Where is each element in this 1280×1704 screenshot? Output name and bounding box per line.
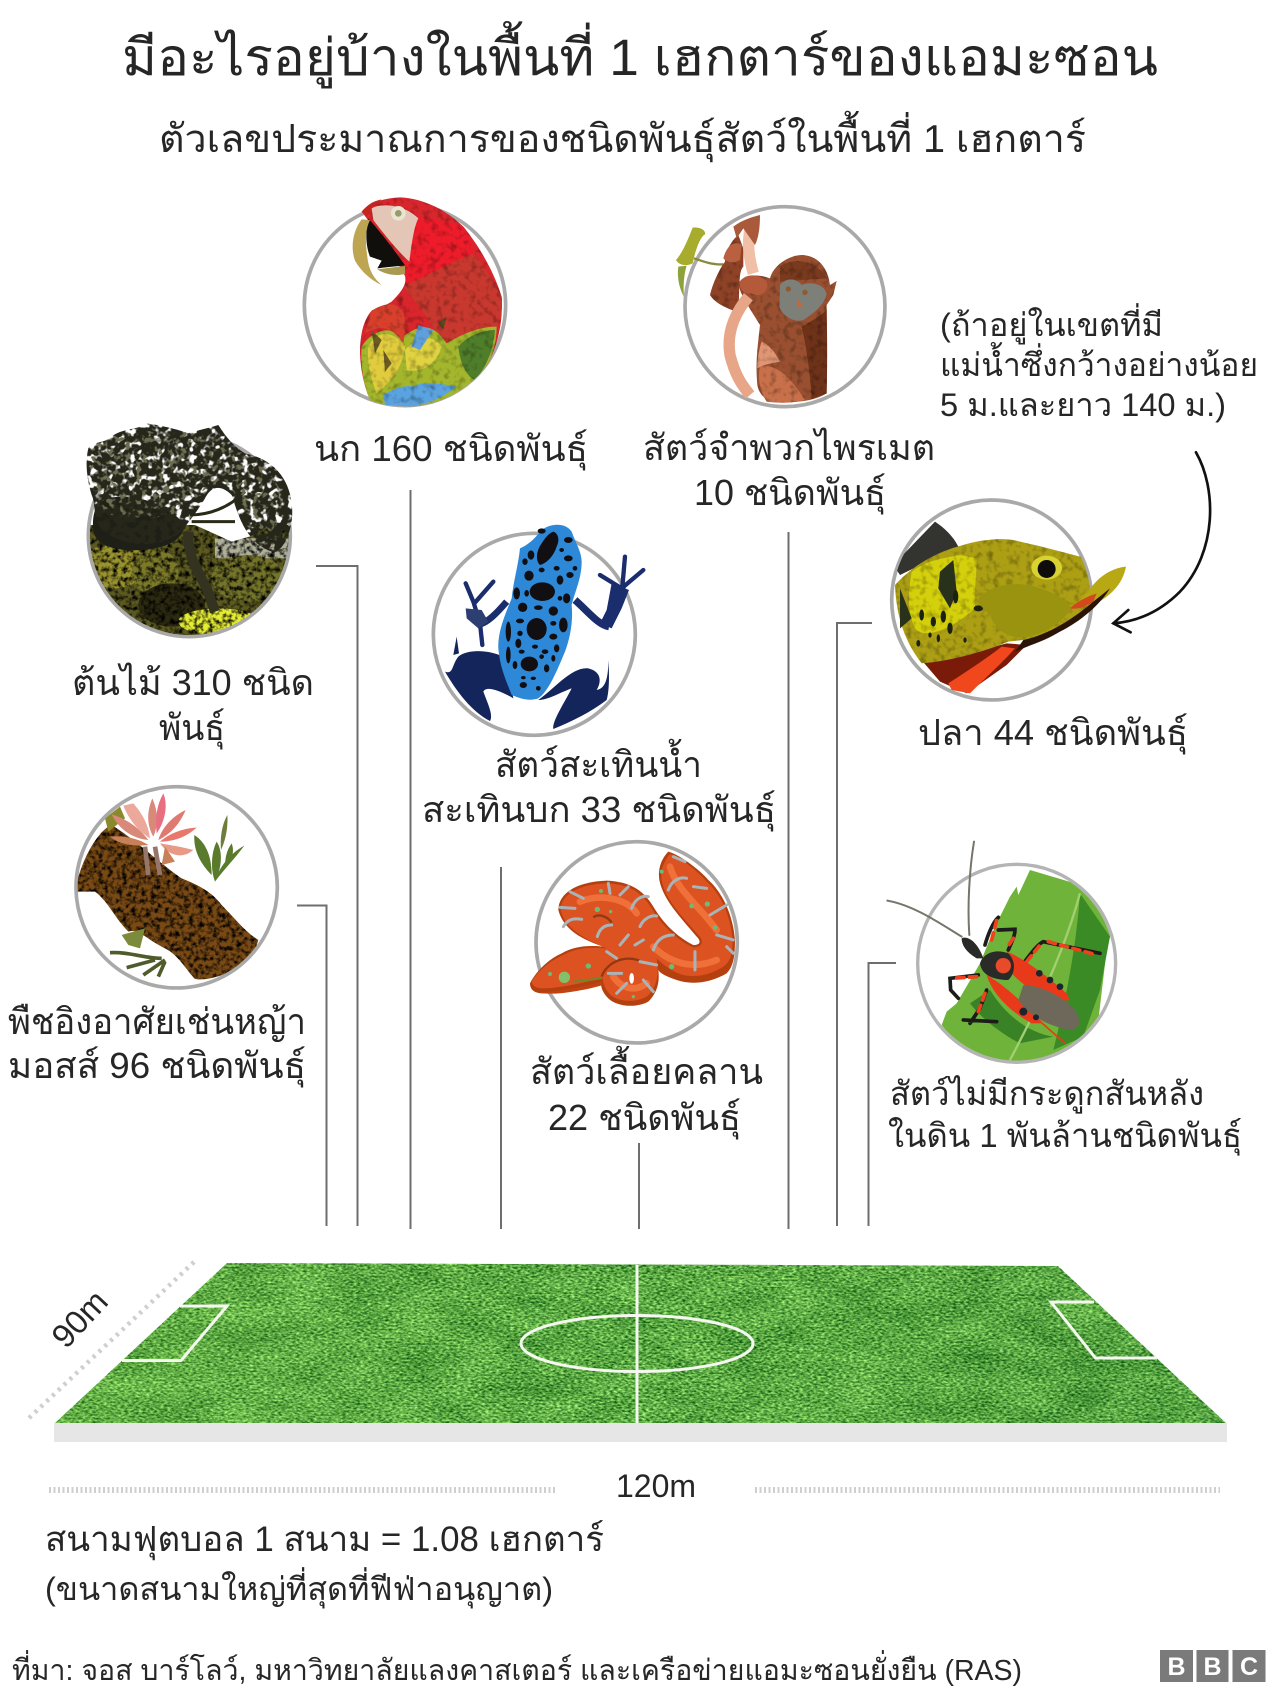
label: นก 160 ชนิดพันธุ์ <box>314 428 588 471</box>
text: pitch size note <box>45 1520 604 1609</box>
subtitle: ตัวเลขประมาณการของชนิดพันธุ์สัตว์ในพื้นที่ 1 เฮกตาร์ <box>159 110 1086 163</box>
source: ที่มา: จอส บาร์โลว์, มหาวิทยาลัยแลงคาสเตอร์ และเครือข่ายแอมะซอนยั่งยืน (RAS) <box>12 1650 1022 1687</box>
arrow: note to fish <box>1113 452 1210 632</box>
icon: rainforest tree in circle <box>85 423 292 638</box>
label: พืชอิงอาศัยเช่นหญ้า <box>8 1001 306 1042</box>
panel: amphibians <box>422 525 776 832</box>
label: สัตว์ไม่มีกระดูกสันหลัง <box>890 1075 1204 1114</box>
grass <box>55 1263 1226 1423</box>
note: river condition: (ถ้าอยู่ในเขตที่มี <box>940 303 1163 345</box>
text: pitch size note: (ขนาดสนามใหญ่ที่สุดที่ฟีฟ่าอนุญาต) <box>45 1567 553 1609</box>
icon: peacock bass in circle <box>892 500 1126 700</box>
BBC logo: B <box>1203 1653 1222 1681</box>
text: pitch size note: สนามฟุตบอล 1 สนาม = 1.08 เฮกตาร์ <box>45 1520 604 1560</box>
label <box>72 662 314 750</box>
icon: tree boa in circle <box>530 842 737 1043</box>
label <box>8 1001 306 1088</box>
label: 22 ชนิดพันธุ์ <box>548 1097 741 1140</box>
label: สัตว์เลื้อยคลาน <box>530 1045 763 1092</box>
icon: assassin bug on leaf in circle <box>887 842 1120 1063</box>
label <box>643 427 935 515</box>
label: ต้นไม้ 310 ชนิด <box>72 662 314 703</box>
icon: bromeliad on mossy branch in circle <box>75 787 277 988</box>
label: สัตว์สะเทินน้ำ <box>495 738 702 785</box>
panel: primates <box>643 207 935 515</box>
label: 10 ชนิดพันธุ์ <box>694 472 886 515</box>
label: พันธุ์ <box>159 707 225 750</box>
note: river condition <box>940 303 1258 423</box>
connector lines to football pitch <box>297 490 896 1229</box>
icon: poison dart frog in circle <box>433 525 643 735</box>
panel: birds <box>304 197 588 471</box>
panel: trees <box>72 423 314 750</box>
panel: fish <box>892 500 1188 755</box>
title: มีอะไรอยู่บ้างในพื้นที่ 1 เฮกตาร์ของแอมะซอน <box>122 21 1158 89</box>
label: ปลา 44 ชนิดพันธุ์ <box>918 712 1188 755</box>
pitch markings <box>122 1265 1157 1423</box>
panel: invertebrates <box>887 842 1242 1156</box>
label <box>422 738 776 832</box>
label: สัตว์จำพวกไพรเมต <box>643 427 935 468</box>
label <box>530 1045 763 1140</box>
dimension: 90m <box>29 1262 194 1418</box>
icon: macaw in circle <box>304 197 506 407</box>
pitch base <box>54 1423 1227 1442</box>
note: river condition: แม่น้ำซึ่งกว้างอย่างน้อย <box>940 342 1258 383</box>
grass shading <box>55 1263 1226 1423</box>
dimension: 120m: 120m <box>616 1468 696 1504</box>
panel: reptiles <box>530 842 763 1140</box>
label: มอสส์ 96 ชนิดพันธุ์ <box>8 1045 306 1088</box>
label: ในดิน 1 พันล้านชนิดพันธุ์ <box>888 1117 1242 1156</box>
BBC logo: C <box>1240 1653 1258 1681</box>
note: river condition: 5 ม.และยาว 140 ม.) <box>940 387 1226 423</box>
icon: howler monkey in circle <box>676 207 885 407</box>
dimension: 90m: 90m <box>44 1283 115 1355</box>
football pitch <box>54 1263 1227 1442</box>
panel: epiphytes <box>8 787 306 1088</box>
label: สะเทินบก 33 ชนิดพันธุ์ <box>422 789 776 832</box>
label <box>888 1075 1242 1156</box>
BBC logo: B <box>1167 1653 1186 1681</box>
BBC logo <box>1160 1650 1266 1682</box>
